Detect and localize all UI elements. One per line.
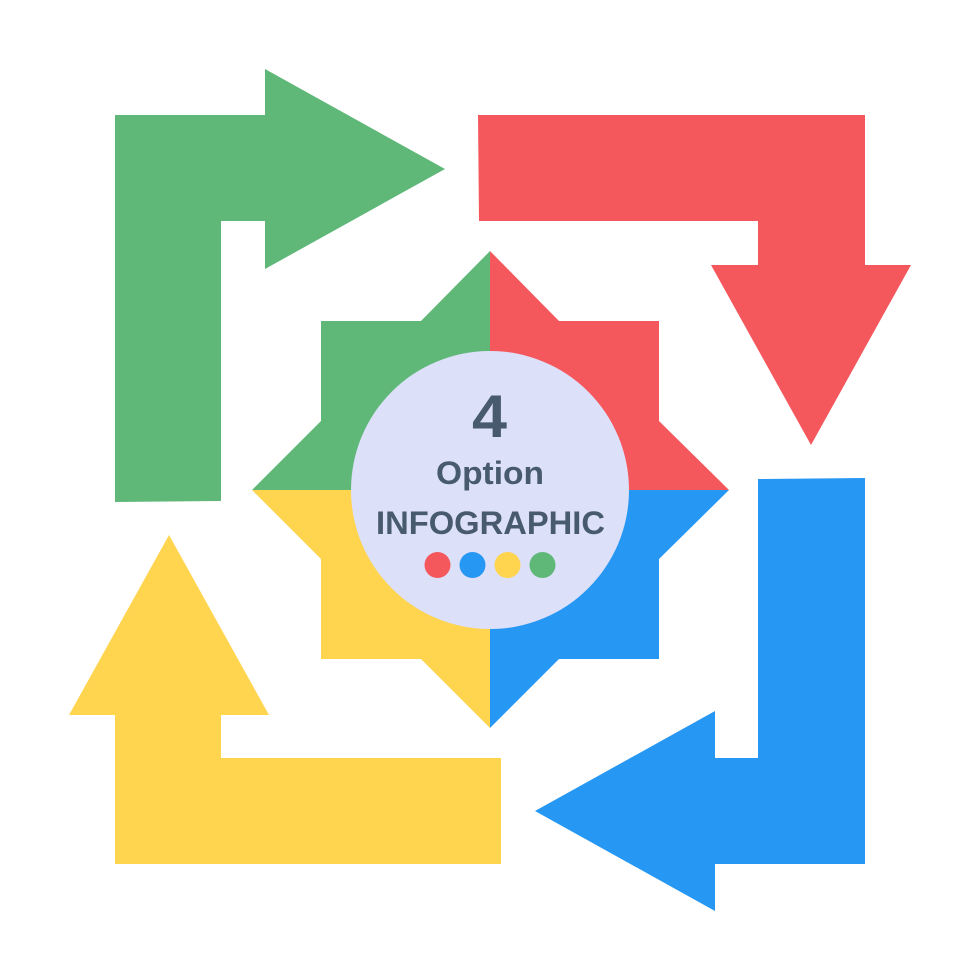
center badge xyxy=(351,351,629,629)
arrow: blue bottom-right xyxy=(535,478,865,911)
star: yellow quadrant xyxy=(252,490,490,728)
label: INFOGRAPHIC: INFOGRAPHIC xyxy=(376,505,605,541)
arrow: red top-right xyxy=(478,115,911,445)
star: red quadrant xyxy=(490,251,729,490)
star: green quadrant xyxy=(252,251,490,490)
center circle xyxy=(351,351,629,629)
star: blue quadrant xyxy=(490,490,729,728)
arrow: green top-left xyxy=(115,69,445,502)
number 4: 4 xyxy=(472,383,508,450)
color dots xyxy=(424,552,556,578)
arrow: yellow bottom-left xyxy=(69,535,501,864)
label: Option: Option xyxy=(436,455,544,491)
